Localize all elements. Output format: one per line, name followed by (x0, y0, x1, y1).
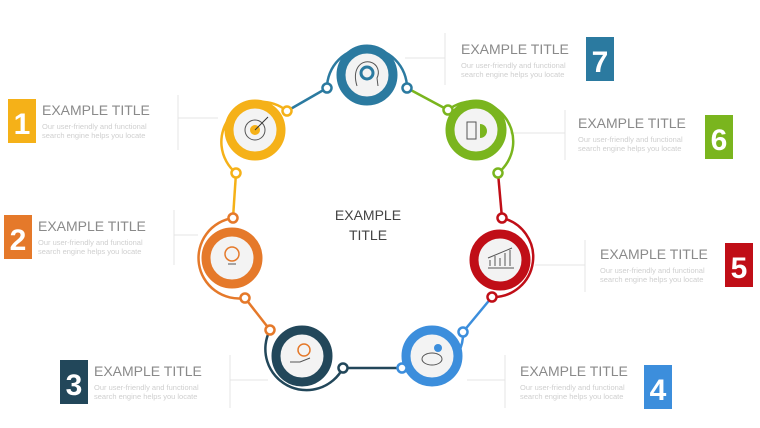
text: Our user-friendly and functional (520, 383, 625, 392)
text: Our user-friendly and functional (38, 238, 143, 247)
text blocks: EXAMPLE TITLE (461, 41, 569, 57)
circle 5 (474, 218, 533, 297)
text: Our user-friendly and functional (94, 383, 199, 392)
text: search engine helps you locate (42, 131, 145, 140)
connectors (233, 88, 502, 368)
text blocks: EXAMPLE TITLE (520, 363, 628, 379)
circle 1 (221, 102, 287, 173)
circle 7 (327, 48, 407, 101)
center title (335, 207, 401, 243)
text: Our user-friendly and functional (461, 61, 566, 70)
text: search engine helps you locate (600, 275, 703, 284)
text blocks: EXAMPLE TITLE (94, 363, 202, 379)
circle 3 (265, 330, 343, 390)
text: search engine helps you locate (520, 392, 623, 401)
text: search engine helps you locate (461, 70, 564, 79)
text: search engine helps you locate (38, 247, 141, 256)
text blocks (38, 41, 708, 379)
text blocks: EXAMPLE TITLE (38, 218, 146, 234)
number boxes: 6 (711, 124, 727, 157)
center title: TITLE (349, 227, 387, 243)
dots (228, 84, 506, 372)
number boxes: 5 (731, 252, 747, 285)
text blocks: EXAMPLE TITLE (42, 102, 150, 118)
number boxes: 1 (14, 108, 30, 141)
circle 6 (448, 101, 513, 173)
text blocks: EXAMPLE TITLE (578, 115, 686, 131)
number boxes: 3 (66, 369, 82, 402)
circle 4 (402, 330, 463, 382)
text: Our user-friendly and functional (42, 122, 147, 131)
text: search engine helps you locate (578, 144, 681, 153)
number boxes: 4 (650, 374, 667, 407)
text: search engine helps you locate (94, 392, 197, 401)
text: Our user-friendly and functional (578, 135, 683, 144)
center title: EXAMPLE (335, 207, 401, 223)
number boxes: 2 (10, 224, 26, 257)
circle 2 (199, 218, 258, 298)
number boxes: 7 (592, 46, 608, 79)
text: Our user-friendly and functional (600, 266, 705, 275)
text blocks: EXAMPLE TITLE (600, 246, 708, 262)
